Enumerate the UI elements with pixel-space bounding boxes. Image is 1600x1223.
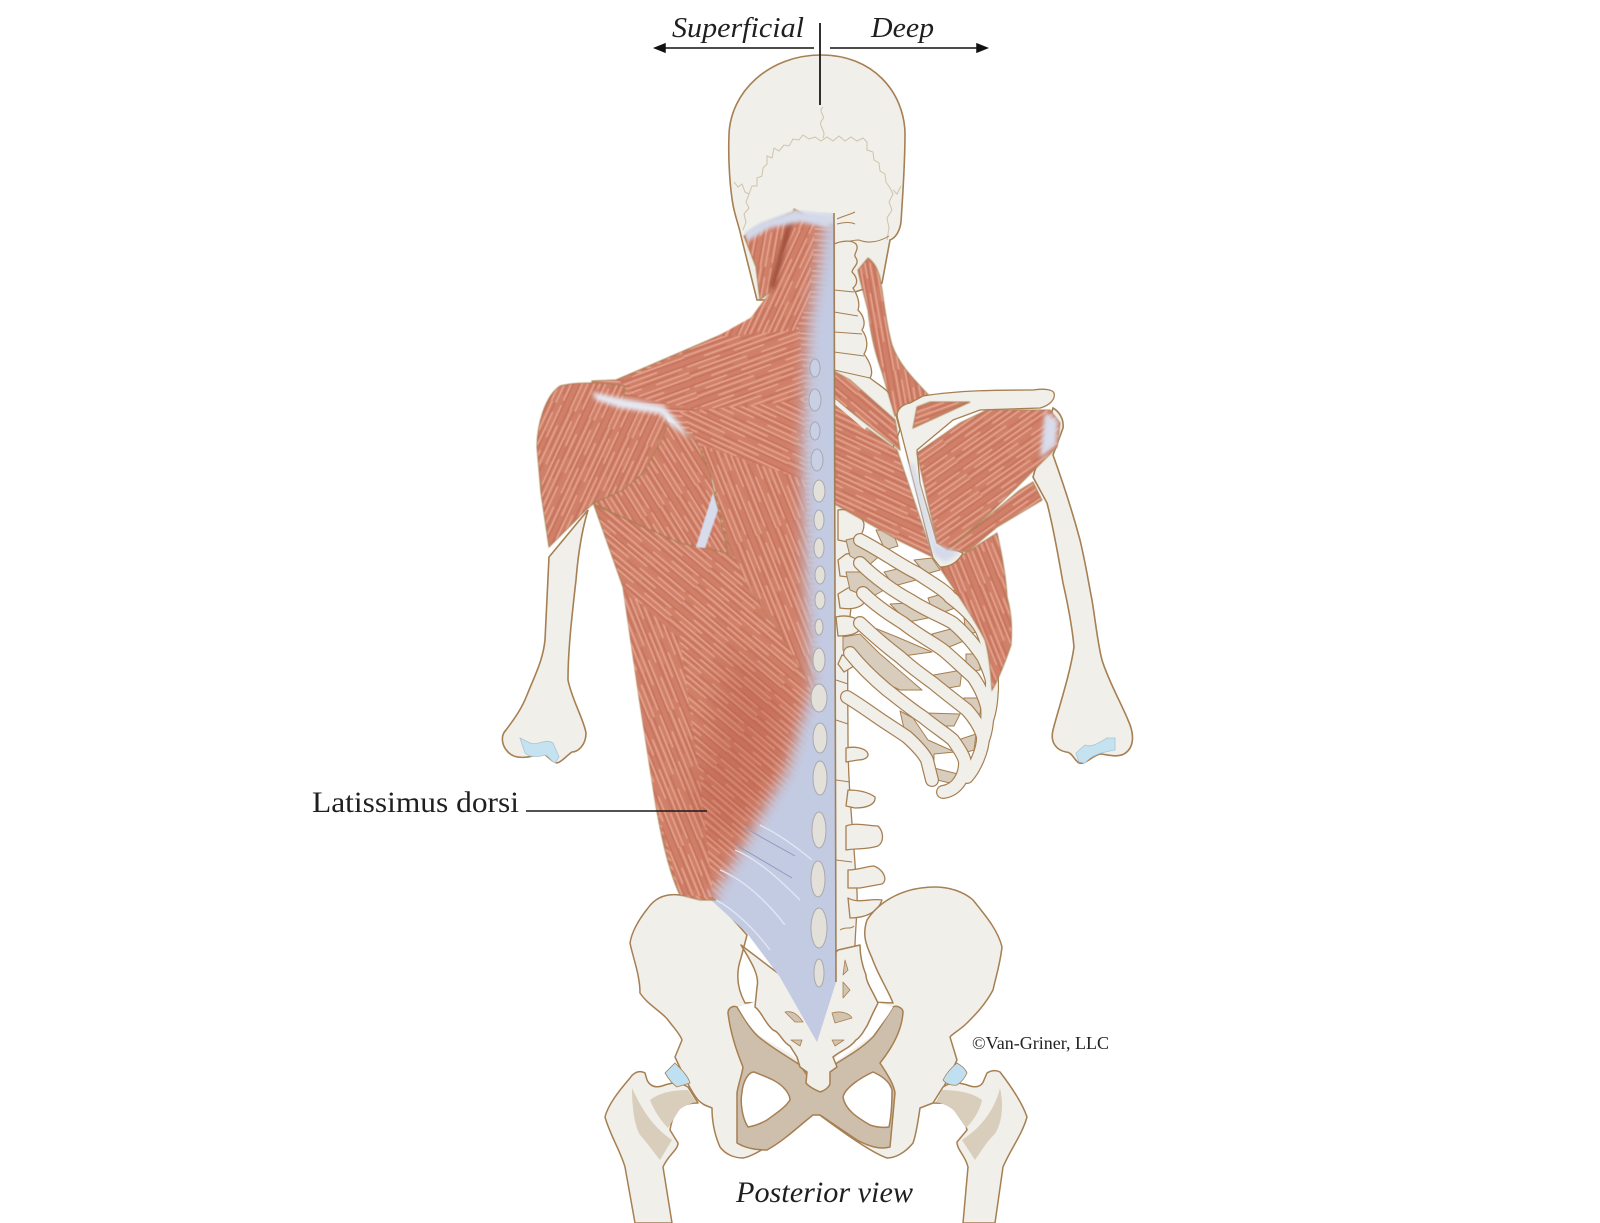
- arrow: superficial: [655, 44, 814, 52]
- trapezius neck fibres: [716, 212, 815, 340]
- ribs fill: [847, 540, 992, 792]
- rhomboid major: [832, 403, 933, 557]
- neck crease shadow: [772, 216, 792, 288]
- pelvis: [630, 887, 1002, 1158]
- levator scapulae: [858, 258, 933, 416]
- fascia right edge line: [834, 213, 836, 982]
- serratus anterior: [940, 533, 1012, 690]
- intercostal tan bands: [843, 530, 982, 784]
- right femur: [933, 1071, 1027, 1223]
- rib cage: [843, 530, 992, 792]
- teres major: [947, 482, 1042, 552]
- thoracic knobs: [836, 510, 866, 672]
- pubic tan band: [728, 1006, 903, 1150]
- deep muscles on scapula: [913, 402, 1060, 552]
- acromion tendon: [592, 392, 696, 445]
- copyright: ©Van-Griner, LLC: [972, 1033, 1109, 1053]
- title: superficial label: Superficial: [672, 12, 804, 44]
- figure: skeleton and back muscles: [502, 55, 1133, 1223]
- trapezius lower fibres: [700, 445, 815, 700]
- scapular border tendon: [696, 493, 718, 548]
- right ilium: [817, 887, 1002, 1158]
- infraspinatus left: [592, 420, 728, 553]
- right scapula: [897, 389, 1054, 567]
- left femur shading: [632, 1088, 696, 1160]
- trapezius: [592, 209, 834, 710]
- lumbar processes: [846, 747, 885, 918]
- left humerus: [502, 510, 588, 763]
- right elbow cartilage: [1076, 738, 1115, 763]
- spine: [832, 241, 900, 990]
- trapezius transition fibres: [680, 400, 805, 480]
- thoracolumbar aponeurosis: [713, 200, 850, 1060]
- right scapula medial-border tendon: [908, 462, 960, 562]
- pelvic crescents: [738, 1000, 893, 1064]
- white line: rib strip: [832, 399, 866, 428]
- right femur shading: [936, 1088, 1002, 1160]
- fascia blending: [592, 200, 850, 1060]
- lat lower fibres: [623, 587, 713, 897]
- leader line: [526, 810, 707, 812]
- divider line: [819, 23, 821, 105]
- cervical and thoracic column: [832, 241, 900, 990]
- infraspinatus: [917, 410, 1060, 550]
- trapezius mid fibres: [620, 330, 805, 410]
- arrow: deep: [830, 44, 987, 52]
- supraspinatus: [913, 402, 970, 428]
- left ilium: [630, 895, 813, 1158]
- caption: posterior view: Posterior view: [735, 1176, 913, 1209]
- left hip cartilage: [665, 1063, 690, 1087]
- nuchal fascia at occiput: [744, 210, 830, 242]
- ribs outline: [847, 540, 992, 792]
- deep muscles right: [832, 258, 1012, 690]
- lines: vertebra edges: [834, 290, 870, 930]
- right hip cartilage: [943, 1063, 967, 1085]
- aponeurosis dark lines: [738, 828, 795, 878]
- label: latissimus dorsi: Latissimus dorsi: [312, 786, 519, 819]
- title: deep label: Deep: [870, 12, 934, 44]
- lat shading: [690, 640, 790, 860]
- lumbar fascia base: [700, 700, 836, 1042]
- right obturator foramen: [843, 1072, 892, 1127]
- sacrum: [741, 945, 878, 1092]
- skull and neck: [729, 55, 905, 300]
- rhomboid minor: [832, 370, 900, 450]
- aponeurosis highlights: [716, 825, 812, 950]
- sacral foramina: [785, 960, 852, 1046]
- right tendon at humerus: [1040, 412, 1058, 458]
- superficial muscles left: [537, 209, 834, 900]
- left femur: [605, 1072, 698, 1223]
- spinous processes: [809, 359, 827, 987]
- left elbow cartilage: [520, 738, 559, 763]
- left obturator foramen: [741, 1072, 790, 1127]
- latissimus dorsi: [594, 470, 830, 900]
- deltoid: [537, 383, 668, 547]
- right humerus: [1033, 408, 1133, 763]
- neck splenius: [744, 212, 794, 300]
